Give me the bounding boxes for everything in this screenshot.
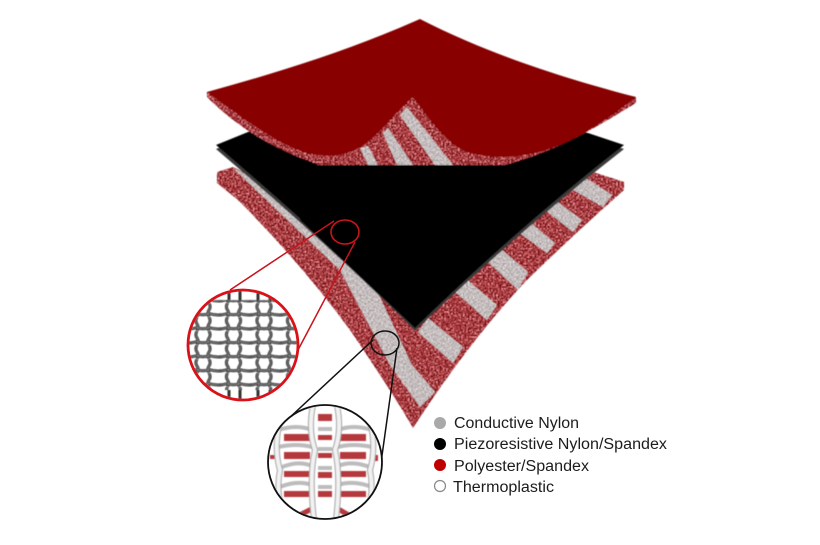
callout connector lines xyxy=(230,221,355,350)
infographic canvas xyxy=(186,18,667,520)
bottom layer: striped polyester and conductive nylon xyxy=(210,160,630,435)
vertical thermoplastic columns xyxy=(277,405,373,520)
top layer: red sheet with curled corner xyxy=(205,19,639,166)
callout target ring xyxy=(331,220,359,244)
legend item: thermoplastic: Thermoplastic xyxy=(453,479,554,496)
legend item: conductive nylon: Conductive Nylon xyxy=(454,415,579,432)
legend item: piezoresistive nylon/spandex: Piezoresistive Nylon/Spandex xyxy=(454,436,667,453)
bottom callout connector lines xyxy=(287,340,397,470)
legend item: polyester/spandex: Polyester/Spandex xyxy=(454,458,589,475)
bottom callout target ring xyxy=(371,331,399,355)
black sheet front edge overlapping the curl xyxy=(300,165,560,328)
zoom callout: bottom layer knit structure xyxy=(268,331,399,520)
zoom callout: piezoresistive knit xyxy=(186,220,359,400)
middle layer: black piezoresistive sheet xyxy=(216,100,624,331)
curled stripes on the underside xyxy=(359,106,454,166)
gray horizontal thermoplastic loops xyxy=(278,427,372,487)
red polyester bars xyxy=(270,414,378,518)
legend xyxy=(434,415,667,496)
structure detail lens xyxy=(268,405,382,520)
knit detail lens xyxy=(186,290,301,400)
